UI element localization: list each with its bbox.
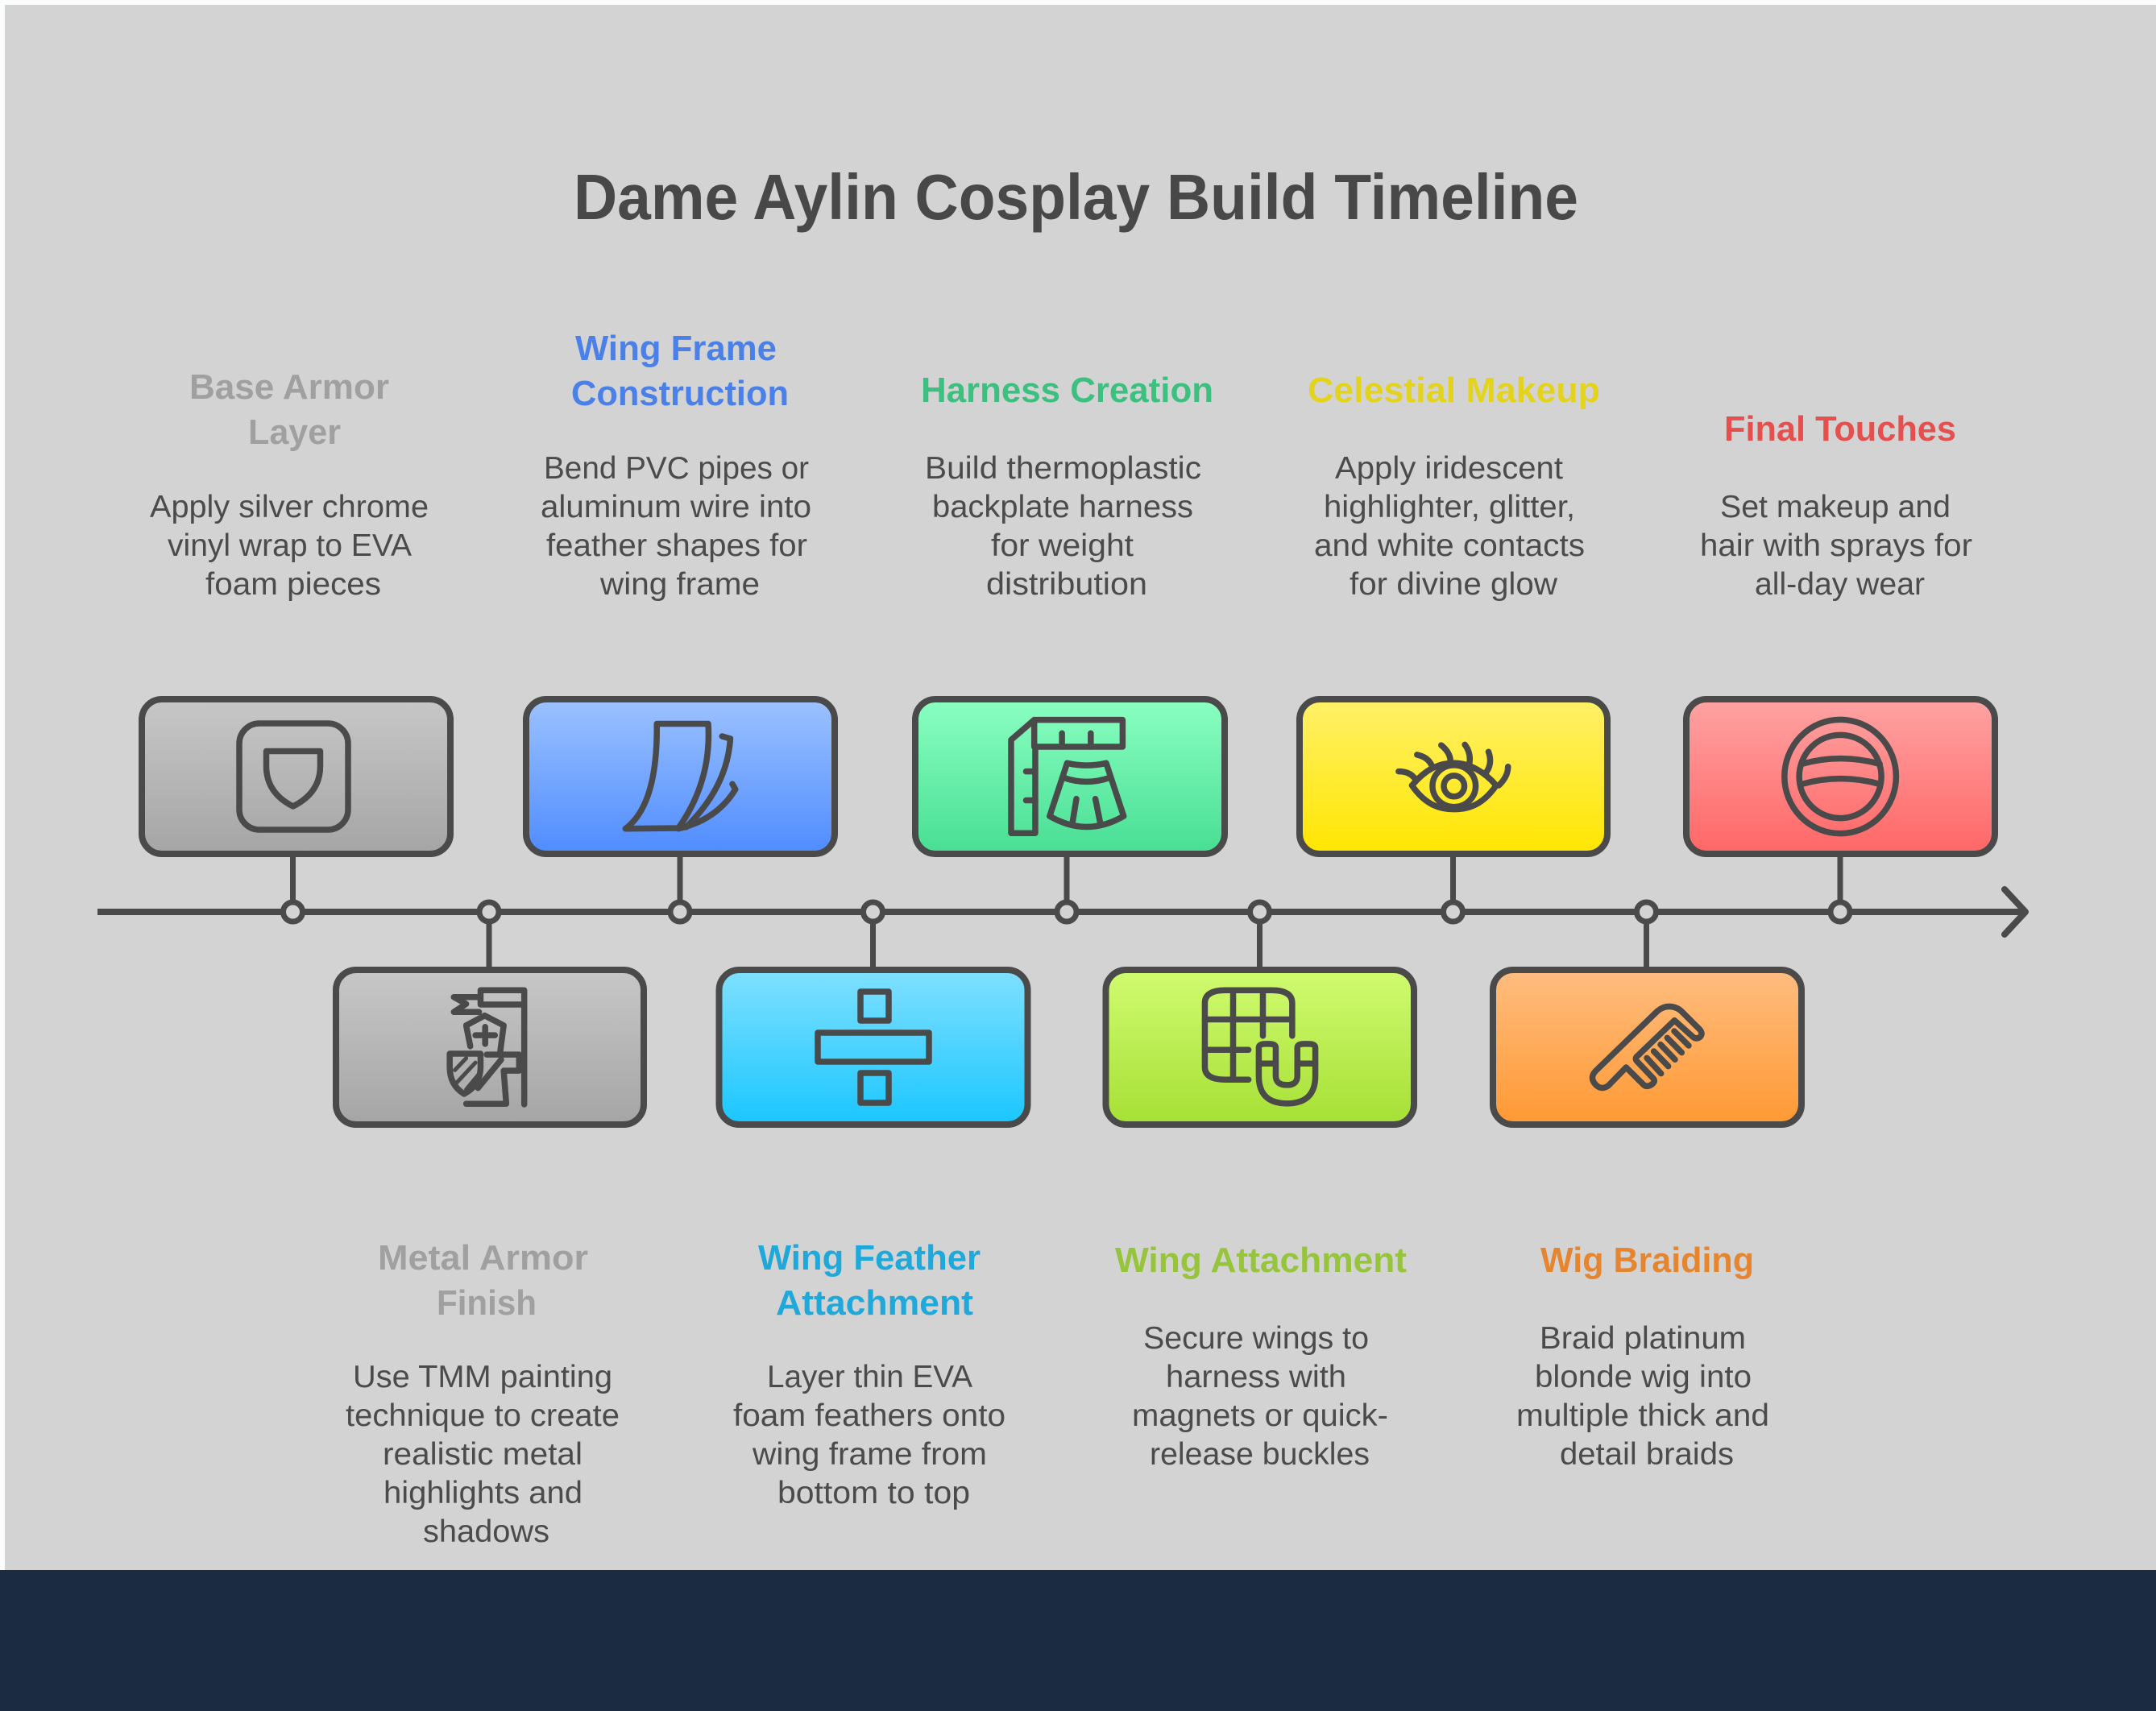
card: Wing Feather (719, 970, 1028, 1125)
text: Base Armor description: foam pieces (205, 567, 381, 602)
timeline arrow (97, 889, 2025, 934)
heading: Base Armor Layer: Base Armor (189, 367, 389, 407)
text: Final Touches description: all-day wear (1755, 567, 1925, 602)
text: Final Touches description: hair with sprays for (1700, 528, 1972, 563)
text: Wig Braiding description: multiple thick and (1516, 1398, 1769, 1433)
heading: Wing Feather Attachment: Attachment (776, 1283, 973, 1323)
card: Celestial Makeup (1300, 699, 1607, 854)
card: Base Armor (142, 699, 450, 854)
panel: step 8 Wig Braiding (1493, 902, 1802, 1472)
icon: shield (239, 723, 348, 830)
icon: grid and magnet (1204, 990, 1316, 1104)
connector node (1250, 902, 1270, 968)
heading: Wig Braiding: Wig Braiding (1540, 1241, 1754, 1280)
text: Final Touches description: Set makeup and (1720, 490, 1951, 524)
card: Harness (915, 699, 1225, 854)
icon: eye with lashes (1399, 744, 1508, 810)
connector node (864, 902, 883, 968)
heading: Celestial Makeup: Celestial Makeup (1308, 371, 1600, 410)
panel: step 5 Harness Creation (915, 371, 1225, 922)
heading: Base Armor Layer: Layer (248, 412, 341, 452)
card: Wing Attachment (1105, 970, 1414, 1125)
card: Wig Braiding (1493, 970, 1802, 1125)
icon: feather frame (625, 723, 736, 829)
text: Harness description: for weight (991, 528, 1134, 563)
icon: stacked feather bars (818, 992, 929, 1103)
heading: Wing Frame Construction: Wing Frame (575, 329, 777, 368)
text: Metal Armor description: highlights and (384, 1476, 583, 1510)
heading: Metal Armor Finish (378, 1238, 588, 1323)
text: Wing Feather description: wing frame from (752, 1437, 987, 1472)
text: Final Touches description (1700, 490, 1972, 602)
connector node (1057, 856, 1076, 922)
panel: step 1 Base Armor Layer (142, 367, 450, 922)
connector node (1637, 902, 1656, 968)
panel: step 3 Wing Frame Construction (526, 329, 835, 922)
card: Final Touches (1686, 699, 1995, 854)
heading: Base Armor Layer (189, 367, 389, 452)
text: Wing Attachment description: Secure wings to (1143, 1321, 1369, 1356)
text: Wing Frame description: feather shapes for (546, 528, 807, 563)
text: Celestial Makeup description: for divine glow (1350, 567, 1558, 602)
card: Metal Armor (336, 970, 644, 1125)
text: Metal Armor description: shadows (423, 1514, 549, 1549)
text: Wing Frame description (541, 451, 811, 602)
text: Celestial Makeup description: highlighter, glitter, (1324, 490, 1575, 524)
text: Base Armor description: vinyl wrap to EVA (168, 528, 412, 563)
text: Wing Feather description: Layer thin EVA (767, 1360, 972, 1394)
text: Wing Frame description: aluminum wire into (541, 490, 811, 524)
title: Dame Aylin Cosplay Build Timeline (574, 161, 1578, 233)
text: Wing Attachment description: harness with (1166, 1360, 1346, 1394)
text: Metal Armor description: realistic metal (383, 1437, 583, 1472)
heading: Harness Creation: Harness Creation (921, 371, 1213, 410)
text: Wig Braiding description: detail braids (1560, 1437, 1734, 1472)
footer band (0, 1570, 2156, 1711)
text: Metal Armor description: Use TMM painting (353, 1360, 612, 1394)
heading: Wing Attachment: Wing Attachment (1115, 1241, 1407, 1280)
text: Celestial Makeup description: Apply iridescent (1335, 451, 1563, 486)
text: Wing Attachment description: release buckles (1150, 1437, 1370, 1472)
heading: Final Touches: Final Touches (1724, 409, 1956, 449)
text: Wing Attachment description (1132, 1321, 1388, 1472)
text: Base Armor description: Apply silver chrome (150, 490, 429, 524)
text: Celestial Makeup description (1314, 451, 1585, 602)
text: Harness description: backplate harness (932, 490, 1193, 524)
connector node (1831, 856, 1850, 922)
text: Wing Frame description: Bend PVC pipes or (544, 451, 809, 486)
panel: step 6 Wing Attachment (1105, 902, 1414, 1472)
text: Base Armor description (150, 490, 429, 602)
text: Metal Armor description (346, 1360, 620, 1549)
text: Wig Braiding description: Braid platinum (1540, 1321, 1746, 1356)
heading: Metal Armor Finish: Metal Armor (378, 1238, 588, 1278)
heading: Metal Armor Finish: Finish (437, 1283, 537, 1323)
icon: ruler and skirt (1011, 720, 1124, 833)
card: Wing Frame (526, 699, 835, 854)
text: Wig Braiding description (1516, 1321, 1769, 1472)
connector node (479, 902, 499, 968)
heading: Wing Feather Attachment (758, 1238, 981, 1323)
text: Wig Braiding description: blonde wig into (1535, 1360, 1752, 1394)
connector node (284, 856, 303, 922)
text: Wing Feather description: bottom to top (777, 1476, 970, 1510)
heading: Wing Feather Attachment: Wing Feather (758, 1238, 981, 1278)
text: Wing Frame description: wing frame (599, 567, 760, 602)
icon: knight with shield (450, 990, 524, 1104)
connector node (1444, 856, 1463, 922)
text: Wing Feather description (733, 1360, 1005, 1510)
text: Metal Armor description: technique to create (346, 1398, 620, 1433)
text: Harness description: Build thermoplastic (925, 451, 1201, 486)
panel: step 2 Metal Armor Finish (336, 902, 644, 1549)
panel: step 9 Final Touches (1686, 409, 1995, 922)
text: Wing Feather description: foam feathers onto (733, 1398, 1005, 1433)
text: Celestial Makeup description: and white contacts (1314, 528, 1585, 563)
heading: Wing Frame Construction (571, 329, 789, 413)
text: Harness description: distribution (986, 567, 1147, 602)
text: Wing Attachment description: magnets or quick- (1132, 1398, 1388, 1433)
icon: comb (1592, 1006, 1702, 1088)
panel: step 4 Wing Feather Attachment (719, 902, 1028, 1510)
text: Harness description (925, 451, 1201, 602)
panel: step 7 Celestial Makeup (1300, 371, 1607, 922)
icon: sphere (1785, 719, 1896, 834)
connector node (670, 856, 690, 922)
heading: Wing Frame Construction: Construction (571, 374, 789, 413)
